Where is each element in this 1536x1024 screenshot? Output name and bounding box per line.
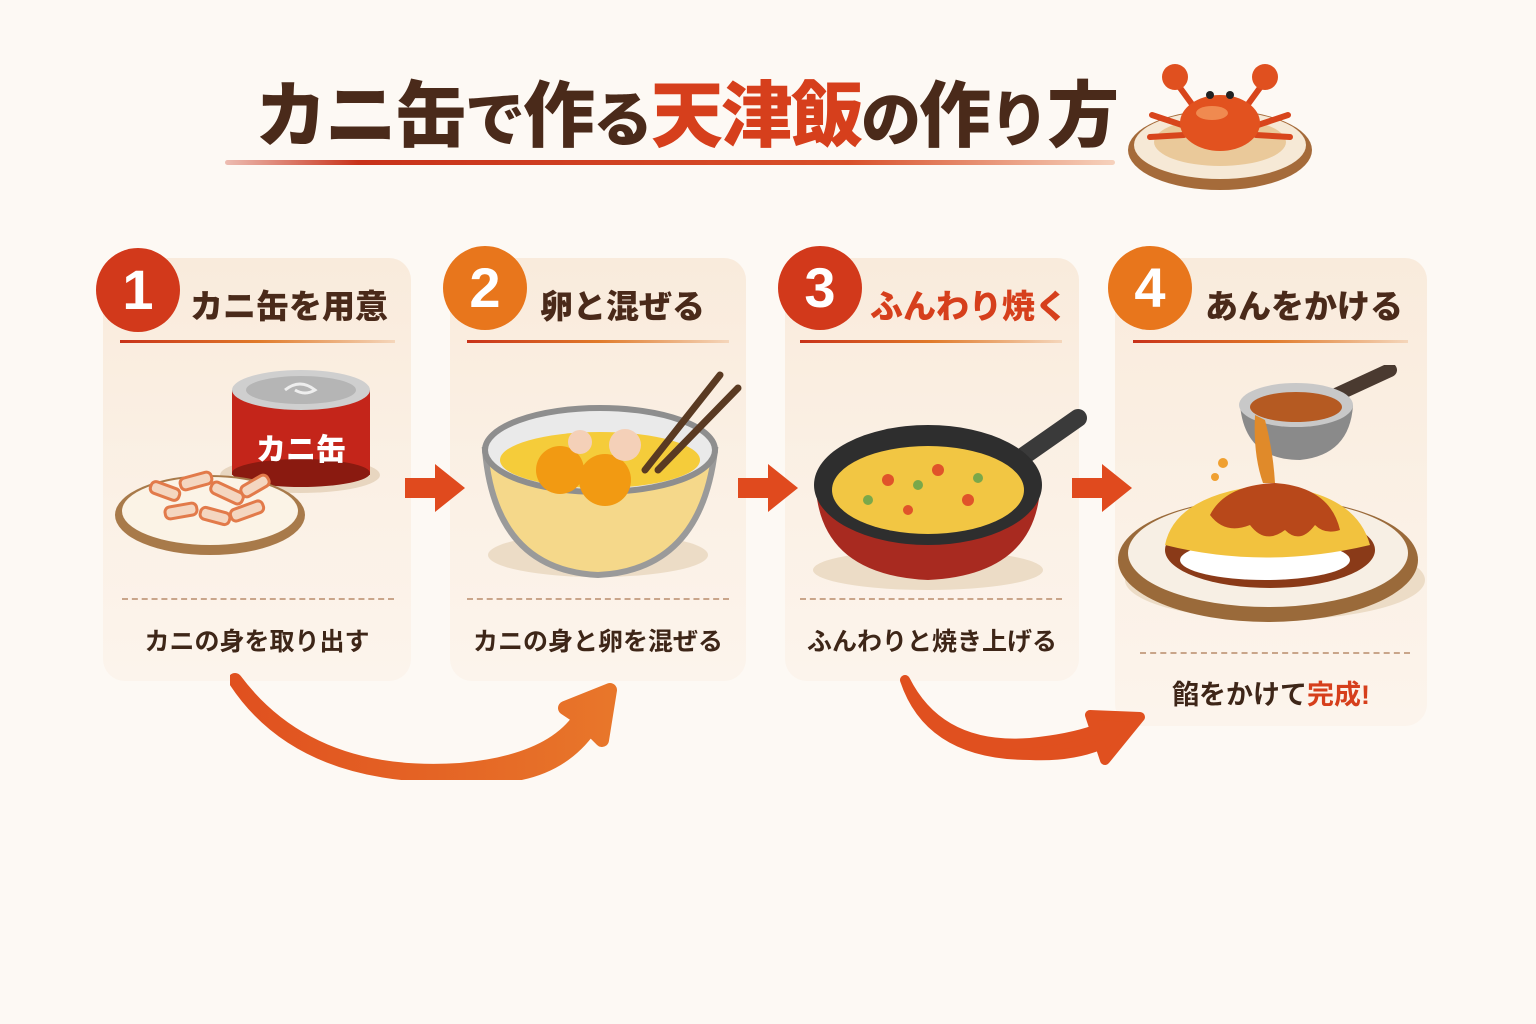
step 3 caption: ふんわりと焼き上げる xyxy=(807,628,1057,656)
step 4 heading: あんをかける xyxy=(1205,288,1403,325)
icon: crab can and crab meat xyxy=(115,370,380,555)
step 4 number xyxy=(1108,246,1192,330)
step 2 heading: 卵と混ぜる xyxy=(540,288,705,325)
step 3 number xyxy=(778,246,862,330)
panel: step 2 xyxy=(450,258,746,681)
step 2 caption: カニの身と卵を混ぜる xyxy=(473,628,723,656)
icon: plate with sauce pouring xyxy=(1118,365,1425,622)
step 4 caption: 餡をかけて完成! xyxy=(1172,680,1370,710)
curved arrow: step 3 to step 4 xyxy=(900,675,1145,765)
arrow: 2 to 3 xyxy=(738,464,798,512)
curved arrow: step 1 to step 2 xyxy=(230,673,617,780)
icon: frying pan with omelet xyxy=(813,409,1087,590)
step 3 number: 3 xyxy=(804,256,836,319)
panel: step 4 xyxy=(1115,258,1427,726)
step 1 number xyxy=(96,248,180,332)
step 1 heading: カニ缶を用意 xyxy=(190,288,388,325)
step 1 caption: カニの身を取り出す xyxy=(144,628,370,656)
title underline xyxy=(225,160,1115,165)
icon: crab plate xyxy=(1128,64,1312,190)
title: カニ缶で作る天津飯の作り方 xyxy=(255,77,1117,157)
step 1 number: 1 xyxy=(122,258,154,321)
icon: bowl with eggs xyxy=(482,372,742,578)
step 4 number: 4 xyxy=(1134,256,1166,319)
arrow: 1 to 2 xyxy=(405,464,465,512)
panel: step 1 xyxy=(103,258,411,681)
step 2 number: 2 xyxy=(469,256,501,319)
step 2 number xyxy=(443,246,527,330)
icon: crab can and crab meat: カニ缶 xyxy=(256,434,346,467)
panel: step 3 xyxy=(785,258,1079,681)
arrow: 3 to 4 xyxy=(1072,464,1132,512)
step 3 heading: ふんわり焼く xyxy=(870,288,1068,325)
